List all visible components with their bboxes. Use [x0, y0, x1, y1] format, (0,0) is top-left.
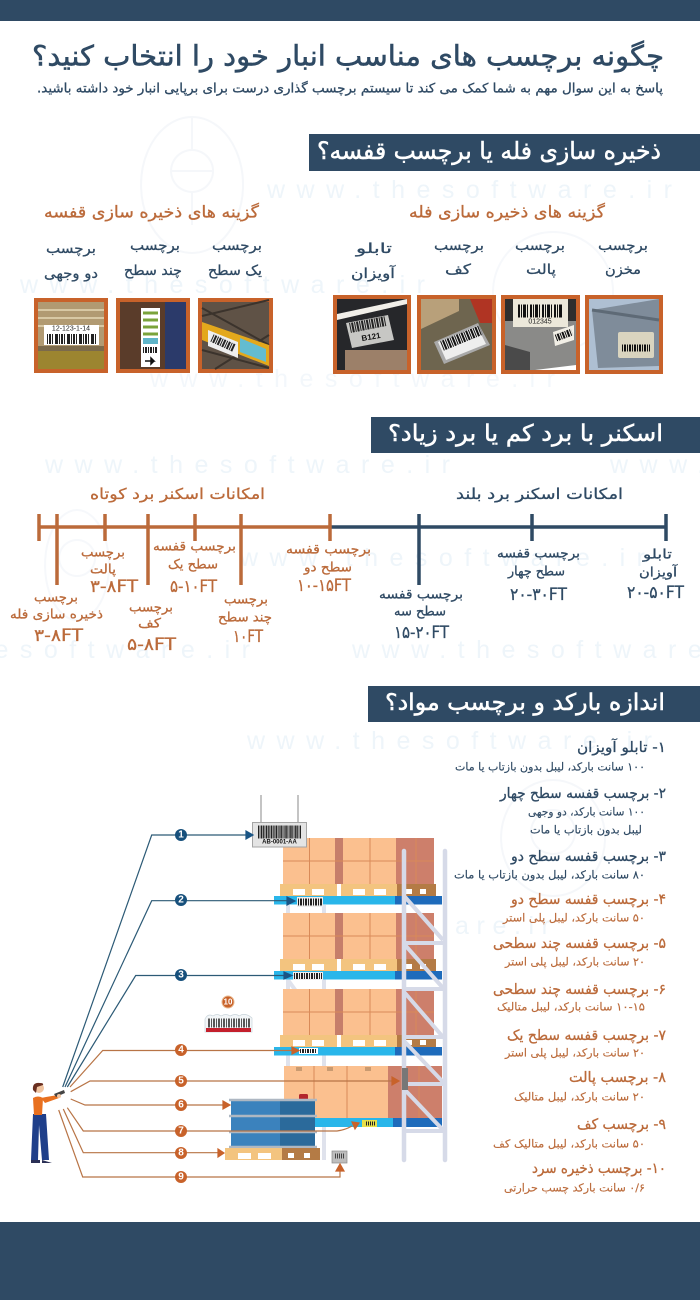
list item 8	[514, 1070, 666, 1104]
tag: rack beam labels	[293, 897, 408, 1127]
watermark background: www.thesoftware.ir	[246, 727, 652, 755]
hanging sign with barcode	[252, 795, 306, 847]
photo: floor label	[417, 295, 496, 374]
range label: bulk storage	[10, 590, 103, 646]
range label: rack level three	[379, 588, 463, 643]
heading: short range: امکانات اسکنر برد کوتاه	[90, 485, 265, 503]
range label: floor: کف	[138, 616, 162, 632]
bottom bar	[0, 1222, 700, 1300]
range label: pallet: پالت	[90, 562, 116, 578]
watermark background: www.thesoftware.ir	[19, 271, 425, 299]
list item 8: ۸- برچسب پالت	[569, 1070, 666, 1086]
list item 5	[493, 936, 666, 968]
section header: scanner range	[371, 417, 700, 453]
range label: hanging sign	[627, 548, 685, 603]
range label: hanging sign: ۲۰-۵۰FT	[627, 583, 685, 603]
photo: pallet label	[501, 295, 580, 374]
list item 1	[455, 738, 666, 774]
range label: rack level four: ۲۰-۳۰FT	[510, 585, 568, 605]
list item 10	[504, 1161, 666, 1194]
section header: scanner range: اسکنر با برد کم یا برد زیاد؟	[388, 421, 663, 447]
worker with scanner	[31, 1083, 65, 1163]
option labels: برچسب	[212, 238, 262, 254]
range label: rack level four: برچسب قفسه	[497, 546, 580, 562]
list item 9	[493, 1117, 666, 1150]
list item 8: ۲۰ سانت بارکد، لیبل متالیک	[514, 1090, 645, 1104]
range label: multi level	[218, 592, 272, 647]
watermark background	[0, 117, 700, 940]
list item 10: ۱۰- برچسب ذخیره سرد	[532, 1161, 666, 1177]
section header: bulk or rack	[309, 134, 700, 171]
number nodes: 9	[178, 1172, 184, 1182]
list item 3: ۳- برچسب قفسه سطح دو	[510, 849, 666, 865]
option labels: برچسب	[598, 238, 648, 254]
heading: bulk storage options: گزینه های ذخیره سازی فله	[409, 202, 605, 222]
hanging sign with barcode: AB-0001-AA	[262, 840, 297, 846]
range label: floor: ۵-۸FT	[127, 635, 177, 655]
list item 2: لیبل بدون بازتاب یا مات	[530, 824, 642, 836]
range label: floor	[127, 600, 177, 655]
list item 4: ۵۰ سانت بارکد، لیبل پلی استر	[502, 912, 645, 924]
watermark background: www.thesoftware.ir	[239, 544, 645, 572]
cold storage label	[205, 1014, 252, 1032]
drum stack on pallet	[225, 1094, 320, 1160]
range label: rack level one: ۵-۱۰FT	[170, 577, 218, 597]
range label: rack level two: برچسب قفسه	[286, 542, 371, 558]
photo: double sided label: 12-123-1-14	[52, 326, 90, 332]
option labels: برچسب	[434, 238, 484, 254]
option labels: کف	[445, 262, 471, 278]
range label: multi level: برچسب	[224, 592, 268, 608]
range label: pallet: برچسب	[81, 546, 125, 560]
option labels: برچسب	[130, 238, 180, 254]
list item 2	[499, 786, 666, 836]
photo: multi level label	[116, 298, 190, 373]
scanner lines blue	[63, 831, 295, 1087]
list item 4	[502, 892, 666, 924]
timeline scale	[39, 514, 666, 585]
range label: pallet	[81, 546, 139, 597]
range label: rack level three: سطح سه	[394, 604, 446, 620]
photo: double sided label	[34, 298, 108, 373]
list item 2: ۲- برچسب قفسه سطح چهار	[499, 786, 666, 802]
range label: rack level four: سطح چهار	[507, 564, 565, 580]
range label: bulk storage: برچسب	[34, 590, 78, 606]
number nodes: 7	[178, 1126, 184, 1136]
range label: rack level two: ۱۰-۱۵FT	[297, 576, 352, 596]
list item 4: ۴- برچسب قفسه سطح دو	[510, 892, 666, 908]
list item 7	[504, 1028, 666, 1060]
heading: rack storage options: گزینه های ذخیره سازی قفسه	[44, 202, 259, 222]
number nodes: 10	[224, 998, 233, 1006]
section header: barcode size and material: اندازه بارکد و برچسب مواد؟	[385, 690, 665, 716]
option labels: دو وجهی	[44, 266, 98, 282]
number nodes: 8	[178, 1148, 184, 1158]
list item 9: ۹- برچسب کف	[577, 1117, 666, 1133]
floor tag	[332, 1151, 347, 1163]
range label: rack level one	[153, 540, 236, 597]
list item 6	[493, 982, 666, 1014]
option labels: چند سطح	[124, 263, 182, 279]
watermark background: www.thesoftware.ir	[44, 451, 450, 479]
option labels: پالت	[526, 262, 556, 278]
number nodes: 6	[178, 1100, 184, 1110]
photo: hanging sign	[333, 295, 411, 374]
list item 6: ۶- برچسب قفسه چند سطحی	[493, 982, 666, 998]
option labels	[44, 238, 648, 282]
scanner lines orange	[59, 1047, 399, 1177]
top bar	[0, 0, 700, 21]
list item 10: ۰/۶ سانت بارکد چسب حرارتی	[504, 1182, 645, 1194]
range label: multi level: چند سطح	[218, 610, 272, 626]
list item 1: ۱- تابلو آویزان	[577, 738, 666, 756]
option labels: یک سطح	[208, 263, 262, 279]
list item 3	[454, 849, 666, 882]
range label: bulk storage: ذخیره سازی فله	[10, 608, 103, 622]
range label: rack level two	[286, 542, 371, 596]
watermark background: www.thesoftware.ir	[149, 365, 555, 393]
list item 6: ۱۰-۱۵ سانت بارکد، لیبل متالیک	[497, 1000, 645, 1014]
range label: rack level three: ۱۵-۲۰FT	[394, 623, 450, 643]
range label: bulk storage: ۳-۸FT	[34, 626, 84, 646]
option labels: برچسب	[515, 238, 565, 254]
photo: hanging sign: B121	[361, 331, 382, 343]
watermark background: are.ir	[455, 912, 550, 940]
range label: floor: برچسب	[129, 600, 173, 616]
range label: rack level one: سطح یک	[168, 558, 218, 572]
watermark background: www.thesoftware.ir	[266, 176, 672, 204]
range label: hanging sign: آویزان	[639, 564, 679, 580]
number nodes: 3	[178, 970, 184, 980]
range label: rack level two: سطح دو	[303, 560, 352, 576]
photo: pallet label: 012345	[528, 318, 552, 326]
range label: rack level one: برچسب قفسه	[153, 540, 236, 554]
number nodes: 4	[178, 1044, 184, 1056]
number nodes: 2	[178, 894, 184, 906]
list item 5: ۵- برچسب قفسه چند سطحی	[493, 936, 666, 952]
option labels: تابلو	[354, 241, 392, 257]
option labels: برچسب	[46, 241, 96, 257]
number nodes: 1	[178, 830, 184, 840]
section header: barcode size and material	[368, 686, 700, 722]
range label: rack level three: برچسب قفسه	[379, 588, 463, 602]
option labels: آویزان	[351, 265, 396, 282]
photo: bin label	[585, 295, 663, 374]
number nodes: 5	[178, 1076, 184, 1086]
photo: single level label	[198, 298, 273, 373]
list item 5: ۲۰ سانت بارکد، لیبل پلی استر	[504, 956, 645, 968]
list item 2: ۱۰۰ سانت بارکد، دو وجهی	[528, 806, 645, 818]
list item 7: ۷- برچسب قفسه سطح یک	[507, 1028, 666, 1044]
title: چگونه برچسب های مناسب انبار خود را انتخاب کنید؟	[32, 40, 664, 72]
range label: rack level four	[497, 546, 580, 605]
range label: hanging sign: تابلو	[642, 548, 672, 562]
number nodes	[175, 829, 234, 1183]
subtitle: پاسخ به این سوال مهم به شما کمک می کند تا سیستم برچسب گذاری درست برای برپایی انبار خود داشته باشید.	[37, 80, 663, 96]
list item 1: ۱۰۰ سانت بارکد، لیبل بدون بازتاب یا مات	[455, 760, 645, 774]
list item 3: ۸۰ سانت بارکد، لیبل بدون بازتاب یا مات	[454, 868, 645, 882]
range label: multi level: ۱۰FT	[233, 627, 263, 647]
section header: bulk or rack: ذخیره سازی فله یا برچسب قفسه؟	[317, 137, 661, 165]
list item 9: ۵۰ سانت بارکد، لیبل متالیک کف	[493, 1138, 645, 1150]
option labels: مخزن	[605, 262, 641, 278]
heading: long range: امکانات اسکنر برد بلند	[456, 485, 623, 503]
list item 7: ۲۰ سانت بارکد، لیبل پلی استر	[504, 1046, 645, 1060]
range label: pallet: ۳-۸FT	[90, 577, 139, 597]
warehouse rack illustration	[225, 838, 445, 1163]
